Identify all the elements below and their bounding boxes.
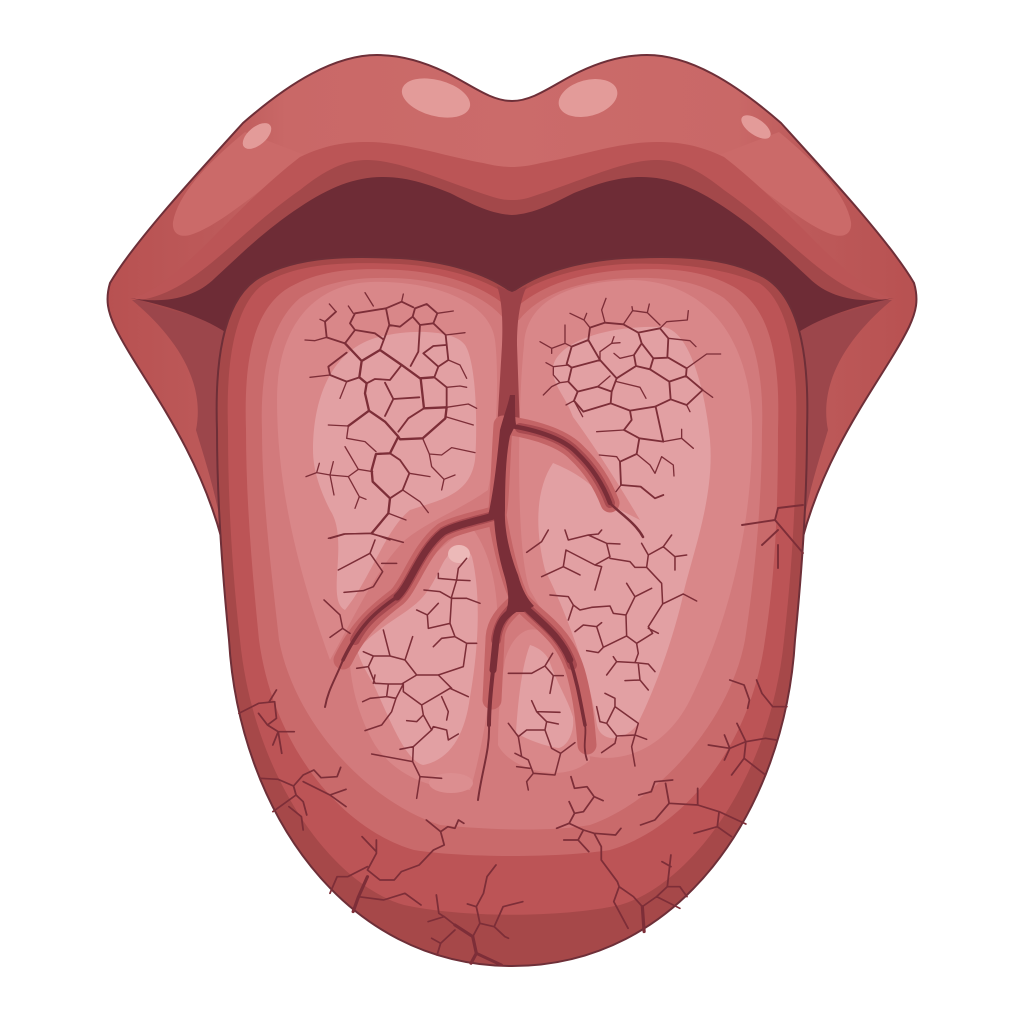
highlight: upper lip right <box>554 73 622 123</box>
fissure lower left branch <box>478 608 516 800</box>
lower lip left shade <box>132 300 240 530</box>
cracks: bottom centre <box>428 865 523 955</box>
upper lip and lip sides <box>108 55 916 540</box>
upper lip lower band <box>132 142 892 320</box>
upper lip inner band <box>140 160 884 330</box>
lower centre lobe <box>498 629 590 773</box>
cracks: lower end of upper left cluster <box>324 533 403 637</box>
highlight: upper lip left <box>398 72 474 124</box>
tongue outline base <box>217 257 807 966</box>
lip highlights <box>238 72 775 154</box>
right upper lobe <box>519 280 752 758</box>
crack: bottom centre thick <box>455 925 501 965</box>
cracks: upper left lobe <box>305 293 477 540</box>
groove shading <box>497 286 527 430</box>
right light patch <box>538 327 711 738</box>
central groove <box>325 286 643 800</box>
fissure inner halos <box>355 428 610 665</box>
crack: bottom right thick <box>642 907 644 932</box>
highlight: lip small left <box>238 118 276 154</box>
lip soft sheen right <box>719 132 851 236</box>
highlight: lip small right <box>737 111 775 143</box>
left upper light patch <box>313 332 476 610</box>
lips <box>108 55 916 540</box>
cracks: lower lobes <box>324 530 697 798</box>
main fissure stem <box>488 395 534 612</box>
cracks: right rim lower <box>639 680 787 837</box>
cracks: lower left lobe <box>357 558 480 798</box>
fissure lower right branch <box>524 606 587 760</box>
cracks: lower centre lobe <box>508 653 575 790</box>
tongue band 2 <box>246 269 778 856</box>
lower left light patch <box>357 548 478 765</box>
lower centre light patch <box>516 645 573 748</box>
lower lip right shade <box>784 300 892 530</box>
cracks: upper right lobe <box>540 298 721 498</box>
cracks: bottom left <box>330 820 464 905</box>
lower left lobe <box>350 525 498 790</box>
mouth interior <box>130 177 894 360</box>
cracks: bottom right <box>557 777 687 928</box>
cracks: left rim upper <box>239 690 294 753</box>
fissure left diagonal <box>325 515 497 707</box>
crack: bottom left thick <box>353 877 367 912</box>
cracks: right rim upper <box>742 505 803 568</box>
lip soft sheen left <box>173 132 305 236</box>
top lobe tip highlight <box>448 545 470 563</box>
fissure outer halos <box>343 425 610 745</box>
cracks: lower right lobe <box>527 530 697 766</box>
cracks: left rim lower <box>260 767 346 830</box>
fissure right diagonal <box>505 425 643 537</box>
tongue band 3 <box>262 278 762 830</box>
tongue <box>217 257 807 966</box>
tongue band 1 <box>228 263 796 915</box>
left upper lobe <box>277 282 497 660</box>
cracks: tongue tip and rim <box>239 680 787 965</box>
small bump highlight <box>429 773 473 793</box>
